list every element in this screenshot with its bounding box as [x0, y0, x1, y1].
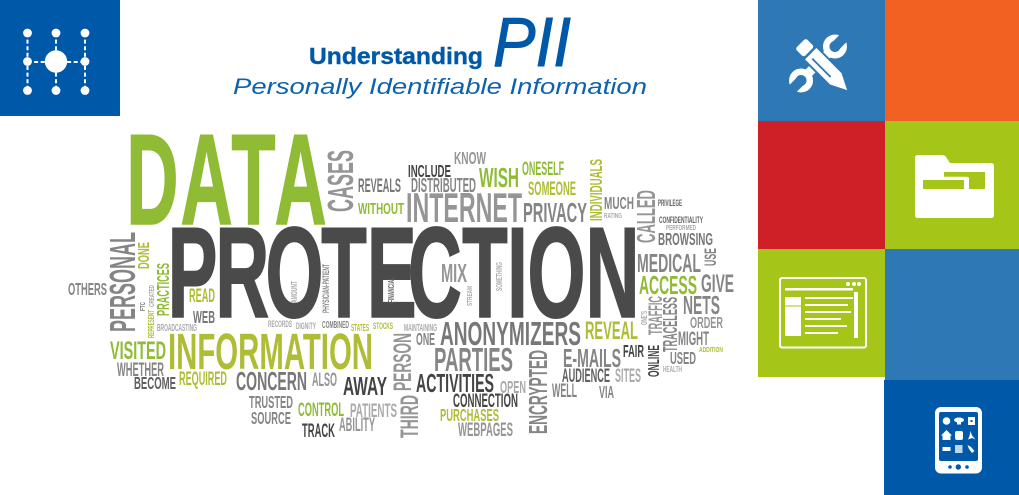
- small words, horizontal: INCLUDE: [408, 161, 451, 181]
- small words, horizontal: CONNECTION: [453, 391, 518, 412]
- small words, vertical: PRACTICES: [153, 263, 173, 316]
- small words, horizontal: E-MAILS: [563, 343, 621, 373]
- small words, vertical: STREAM: [465, 286, 474, 306]
- small words, vertical: PERSONAL: [102, 232, 143, 332]
- small words, horizontal: SOURCE: [251, 408, 291, 428]
- small words, horizontal: AUDIENCE: [562, 366, 610, 387]
- small words, horizontal: PERFORMED: [666, 223, 696, 232]
- small words, vertical: DONE: [136, 242, 153, 269]
- colour tile: green with window icon: [758, 249, 885, 377]
- icon: wrench and pencil: [783, 28, 856, 99]
- small words, horizontal: WELL: [552, 381, 577, 402]
- small words, horizontal: AWAY: [343, 371, 387, 401]
- small words, horizontal: STATES: [351, 323, 369, 334]
- small words, vertical: SOMETHING: [495, 262, 504, 291]
- small words, horizontal: FAIR: [623, 341, 644, 361]
- small words, horizontal: ONESELF: [522, 159, 564, 180]
- small words, vertical: INDIVIDUALS: [586, 159, 606, 221]
- small words, vertical: ENCRYPTED: [523, 350, 553, 434]
- small words, vertical: FTC: [140, 302, 147, 311]
- small words, horizontal: COMBINED: [322, 320, 349, 331]
- small words, horizontal: PURCHASES: [440, 405, 499, 425]
- small words, horizontal: WEB: [193, 307, 215, 327]
- icon: folder: [915, 155, 994, 218]
- small words, horizontal: KNOW: [454, 148, 486, 168]
- small words, horizontal: OTHERS: [68, 279, 107, 299]
- small words, horizontal: REVEALS: [358, 176, 401, 197]
- title: Understanding PII: Understanding: [309, 43, 483, 69]
- small words, vertical: PERSON: [389, 333, 417, 391]
- small words, horizontal: CONTROL: [298, 400, 344, 421]
- small words, horizontal: TRACK: [302, 421, 335, 442]
- small words, horizontal: MIGHT: [678, 329, 709, 350]
- icon: browser window: [780, 278, 866, 348]
- small words, horizontal: SOMEONE: [528, 179, 576, 200]
- small words, horizontal: PATIENTS: [350, 401, 397, 422]
- small words, vertical: FINANCIAL: [387, 277, 396, 303]
- small words, vertical: PHYSICIAN-PATIENT: [321, 264, 331, 313]
- word: DATA: DATA: [126, 108, 327, 252]
- small words, vertical: ONE'S: [640, 311, 649, 325]
- small words, horizontal: DISTRIBUTED: [411, 175, 476, 197]
- small words, horizontal: WISH: [479, 162, 519, 193]
- small words, horizontal: DIGNITY: [296, 321, 316, 331]
- colour tile: blue with tools icon: [758, 0, 885, 121]
- small words, vertical: TRAFFIC: [646, 296, 667, 335]
- small words, horizontal: HEALTH: [663, 364, 682, 374]
- word cloud: CASES: [320, 150, 361, 212]
- colour tile: mid blue: [885, 249, 1019, 380]
- title: Understanding PII: [309, 3, 571, 81]
- small words, horizontal: MEDICAL: [637, 248, 701, 278]
- word: ANONYMIZERS: ANONYMIZERS: [440, 315, 581, 352]
- small words, horizontal: WHETHER: [117, 360, 164, 381]
- small words, vertical: THIRD: [396, 395, 424, 438]
- small words, vertical: REPRESENT: [147, 310, 156, 338]
- small words, horizontal: READ: [189, 286, 215, 307]
- small words, horizontal: VISITED: [110, 337, 166, 365]
- small words, vertical: AMOUNT: [290, 281, 299, 303]
- small words, horizontal: TRUSTED: [249, 392, 293, 412]
- small words, horizontal: STOCKS: [373, 321, 393, 331]
- small words, horizontal: ALSO: [312, 370, 337, 391]
- small words, vertical: ONLINE: [646, 345, 663, 377]
- small words, horizontal: BECOME: [134, 373, 176, 393]
- small words, horizontal: ORDER: [690, 315, 723, 332]
- colour tile: orange: [885, 0, 1019, 121]
- icon: tablet with app glyphs: [935, 407, 982, 474]
- word: PROTECTION: PROTECTION: [168, 202, 640, 345]
- small words, horizontal: GIVE: [701, 270, 734, 298]
- small words, horizontal: BROWSING: [658, 229, 713, 249]
- small words, horizontal: OPEN: [500, 377, 526, 397]
- small words, horizontal: REVEAL: [585, 317, 638, 345]
- word cloud: [68, 108, 734, 442]
- small words, horizontal: VIA: [599, 382, 614, 402]
- small words, horizontal: CONFIDENTIALITY: [659, 215, 703, 226]
- small words, horizontal: MAINTAINING: [404, 323, 437, 334]
- subtitle: Personally Identifiable Information: Personally Identifiable Information: [233, 74, 647, 99]
- small words, horizontal: PRIVACY: [523, 197, 587, 228]
- small words, horizontal: REQUIRED: [179, 369, 227, 390]
- small words, vertical: USE: [701, 248, 720, 266]
- small words, horizontal: MIX: [441, 258, 467, 288]
- word: INFORMATION: INFORMATION: [168, 323, 373, 380]
- small words, vertical: [102, 150, 720, 438]
- small words, horizontal: CONCERN: [236, 366, 307, 396]
- small words, vertical: CALLED: [631, 190, 661, 243]
- small words, horizontal: ABILITY: [339, 415, 375, 436]
- small words, horizontal: ONE: [416, 329, 435, 349]
- colour tile: dark blue with tablet icon: [884, 380, 1019, 495]
- colour tile: red: [758, 121, 885, 249]
- small words, horizontal: PRIVILEGE: [658, 198, 682, 209]
- small words, horizontal: MUCH: [604, 193, 634, 213]
- colour tile: green with folder icon: [885, 121, 1019, 249]
- small words, horizontal: ACCESS: [639, 270, 697, 300]
- small words, horizontal: NETS: [683, 290, 720, 320]
- small words, horizontal: ACTIVITIES: [416, 368, 494, 398]
- small words, horizontal: ADDITION: [699, 345, 723, 354]
- logo panel: hub icon on blue square: [0, 0, 120, 116]
- small words, horizontal: RECORDS: [268, 319, 292, 329]
- small words, horizontal: USED: [670, 348, 696, 368]
- small words, vertical: TRACELESS: [660, 297, 682, 352]
- small words, horizontal: [68, 148, 734, 442]
- title: Understanding PII: PII: [493, 3, 571, 81]
- small words, horizontal: PARTIES: [434, 341, 513, 378]
- small words, horizontal: WITHOUT: [358, 201, 404, 218]
- word: INTERNET: INTERNET: [406, 184, 522, 231]
- small words, horizontal: RATING: [604, 211, 622, 220]
- small words, vertical: CREATED: [147, 285, 156, 307]
- small words, horizontal: SITES: [615, 366, 641, 387]
- small words, horizontal: WEBPAGES: [458, 420, 513, 441]
- small words, horizontal: BROADCASTING: [157, 323, 197, 334]
